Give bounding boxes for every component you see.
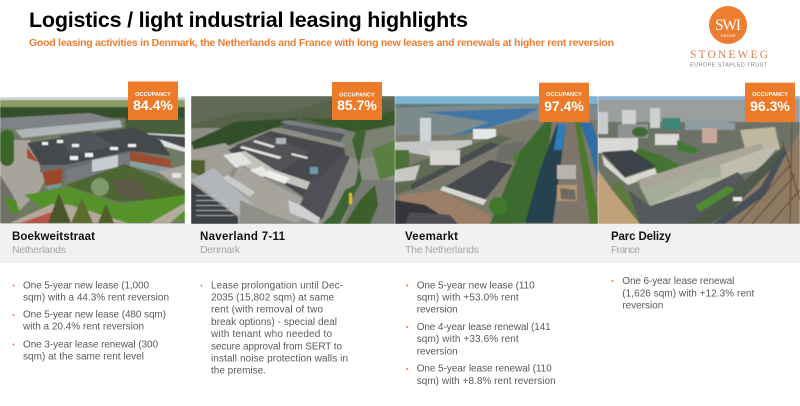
lease bullets [406,280,556,387]
panel: Veemarkt [395,83,598,387]
logo: SWI Group Stoneweg: SWI [715,17,741,34]
photo: Parc Delizy aerial [598,96,800,224]
lease bullets: One 5-year new lease (110 [417,280,535,291]
property name: Denmark [200,244,241,256]
occupancy badge: OCCUPANCY [339,92,375,98]
lease bullets [12,280,169,362]
lease bullet: with tenant who needed to [210,329,332,340]
occupancy badge: 85.7% [337,97,377,113]
lease bullet: break options) - special deal [211,317,337,328]
logo: SWI Group Stoneweg: STONEWEG [690,49,768,61]
lease bullets: One 4-year lease renewal (141 [417,322,551,333]
occupancy badge [128,82,178,120]
occupancy badge [745,83,795,122]
lease bullet [200,280,348,377]
occupancy badge: OCCUPANCY [752,92,788,98]
property name: Netherlands [12,244,66,256]
lease bullets: One 5-year lease renewal (110 [417,364,552,375]
property name: Naverland 7-11 [200,231,286,243]
lease bullets: One 5-year new lease (1,000 [23,280,149,291]
photo: Boekweitstraat aerial [0,97,185,224]
lease bullet: the premise. [211,366,266,377]
lease bullet: install noise protection walls in [211,353,348,364]
lease bullets: sqm) with +53.0% rent [417,292,519,303]
occupancy badge: OCCUPANCY [135,92,171,98]
lease bullets: sqm) with +33.6% rent [417,334,519,345]
property name [200,231,286,256]
lease bullets: sqm) at the same rent level [23,351,144,362]
grey name band [0,224,800,263]
lease bullet: Lease prolongation until Dec- [211,280,343,291]
lease bullet [612,276,755,312]
photo: Veemarkt aerial [395,96,598,224]
photo: Naverland aerial [191,96,395,224]
property name [405,231,479,256]
property name: Parc Delizy [611,231,672,243]
property name [12,231,95,256]
occupancy badge: 84.4% [133,97,173,113]
logo: SWI Group Stoneweg: EUROPE STAPLED TRUST [690,62,768,68]
title: Logistics / light industrial leasing highlights [29,8,468,32]
lease bullet: secure approval from SERT to [211,341,342,352]
subtitle: Good leasing activities in Denmark, the Netherlands and France with long new leases and renewals at higher rent reversion [29,37,614,49]
lease bullets: reversion [417,305,458,316]
lease bullet: (1,626 sqm) with +12.3% rent [622,288,755,299]
property name: The Netherlands [405,244,479,256]
lease bullets: One 5-year new lease (480 sqm) [23,310,166,321]
property name: Veemarkt [405,231,458,243]
property name [611,231,672,256]
lease bullets: sqm) with a 44.3% rent reversion [23,292,169,303]
lease bullet: 2035 (15,802 sqm) at same [211,292,334,303]
occupancy badge: OCCUPANCY [546,92,582,98]
lease bullet: One 6-year lease renewal [622,276,734,287]
lease bullet: rent (with removal of two [211,305,323,316]
property name: Boekweitstraat [12,231,95,243]
panel: Parc Delizy [598,83,800,312]
lease bullets: One 3-year lease renewal (300 [23,339,158,350]
lease bullets: sqm) with +8.8% rent reversion [417,376,556,387]
occupancy badge: 96.3% [750,98,790,114]
lease bullet: reversion [622,301,663,312]
logo: SWI Group Stoneweg: GROUP [720,33,736,38]
occupancy badge [539,83,589,122]
property name: France [611,244,640,256]
panel: Naverland 7-11 [191,82,395,377]
lease bullets: reversion [417,346,458,357]
logo: SWI Group Stoneweg [690,6,768,68]
lease bullets: with a 20.4% rent reversion [22,322,144,333]
occupancy badge [332,82,382,120]
occupancy badge: 97.4% [544,98,584,114]
panel: Boekweitstraat [0,82,185,362]
